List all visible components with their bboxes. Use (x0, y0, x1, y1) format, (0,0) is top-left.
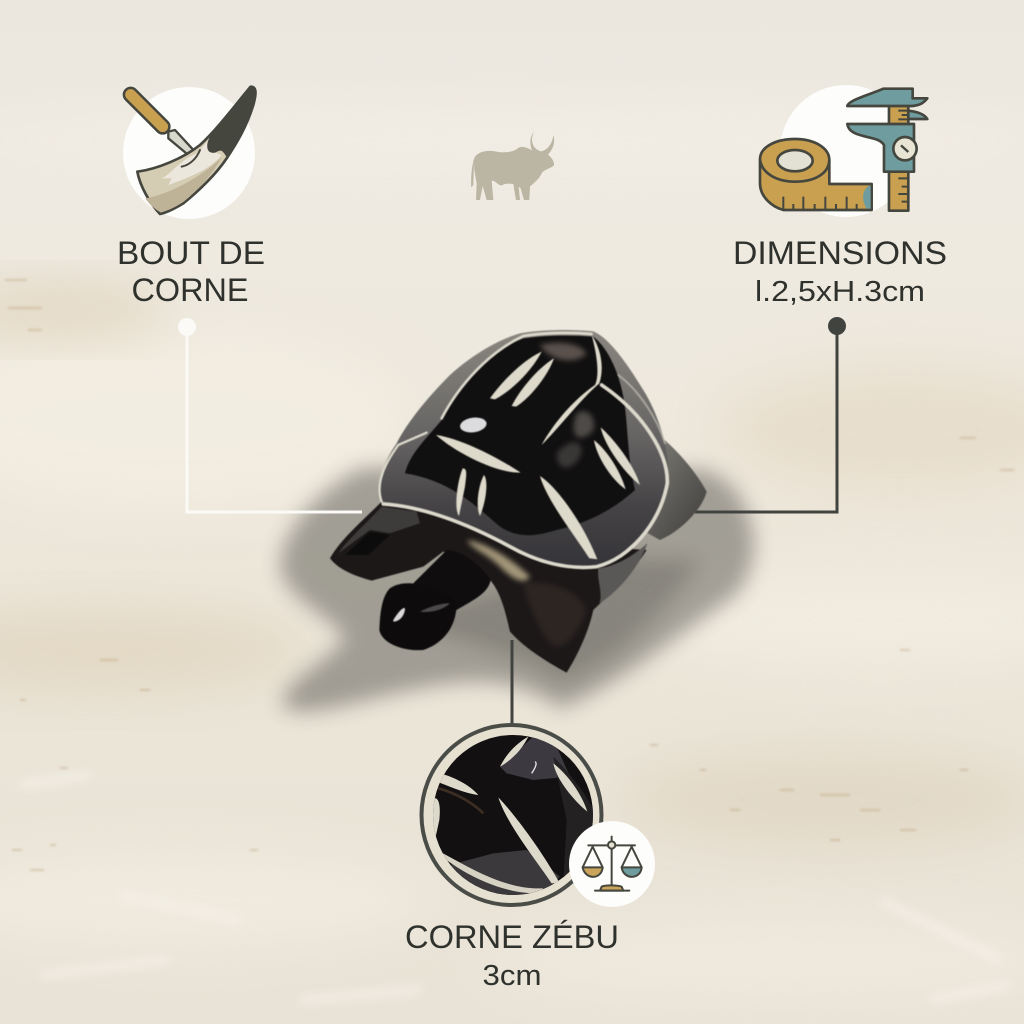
tape core (777, 150, 813, 171)
label: bout de corne (117, 235, 265, 308)
label: corne zebu: CORNE ZÉBU (405, 919, 619, 955)
head (379, 583, 457, 650)
carved line (182, 150, 200, 167)
underside and front feet (330, 502, 647, 673)
medallion ring (422, 725, 602, 905)
label: dimensions (733, 235, 947, 308)
chisel blade (168, 130, 195, 155)
tape measure body (760, 139, 872, 210)
icon: horn and chisel (123, 87, 256, 219)
label: bout de corne: CORNE (132, 272, 248, 308)
right flank reflection (598, 543, 647, 603)
shell highlight (459, 416, 488, 434)
badge: scales icon (569, 821, 655, 907)
caliper slide (847, 124, 914, 172)
horn light streak (162, 137, 222, 185)
icon: tape measure and caliper (760, 85, 927, 217)
horn dark shading (145, 157, 222, 212)
caliper dial (893, 137, 917, 160)
callout line: corne zebu (510, 640, 514, 724)
label: corne zebu (405, 919, 619, 992)
shell grooves (380, 333, 667, 567)
close-up material medallion (420, 723, 607, 910)
caliper scale (889, 103, 908, 211)
shell black mass (405, 336, 635, 535)
rear foot (630, 433, 707, 540)
caliper upper jaw (847, 89, 927, 106)
close-up photo (433, 735, 593, 895)
chisel handle (131, 95, 163, 127)
label: dimensions: l.2,5xH.3cm (755, 276, 925, 308)
label: dimensions: DIMENSIONS (733, 235, 947, 271)
shell rim (380, 330, 668, 566)
roll top edge (760, 159, 829, 182)
tape ticks (783, 197, 857, 210)
label: corne zebu: 3cm (482, 960, 542, 992)
icon: zebu silhouette (471, 132, 554, 200)
head highlight (393, 608, 405, 622)
shadow cast by the turtle (280, 468, 754, 711)
turtle figurine (330, 330, 707, 673)
front foot facet (345, 532, 390, 555)
front left foot sheen (338, 507, 420, 553)
label: bout de corne: BOUT DE (117, 235, 265, 271)
horn dark tip (208, 87, 256, 157)
callout line: bout de corne (178, 318, 362, 512)
head sheen (420, 603, 450, 612)
shell carved marks (436, 335, 640, 559)
caliper slide jaw (908, 111, 927, 119)
tape end tab (863, 185, 871, 209)
mottled horn patches (467, 343, 594, 646)
callout line: dimensions (695, 317, 846, 512)
horn body (137, 87, 256, 214)
neck (410, 550, 491, 610)
